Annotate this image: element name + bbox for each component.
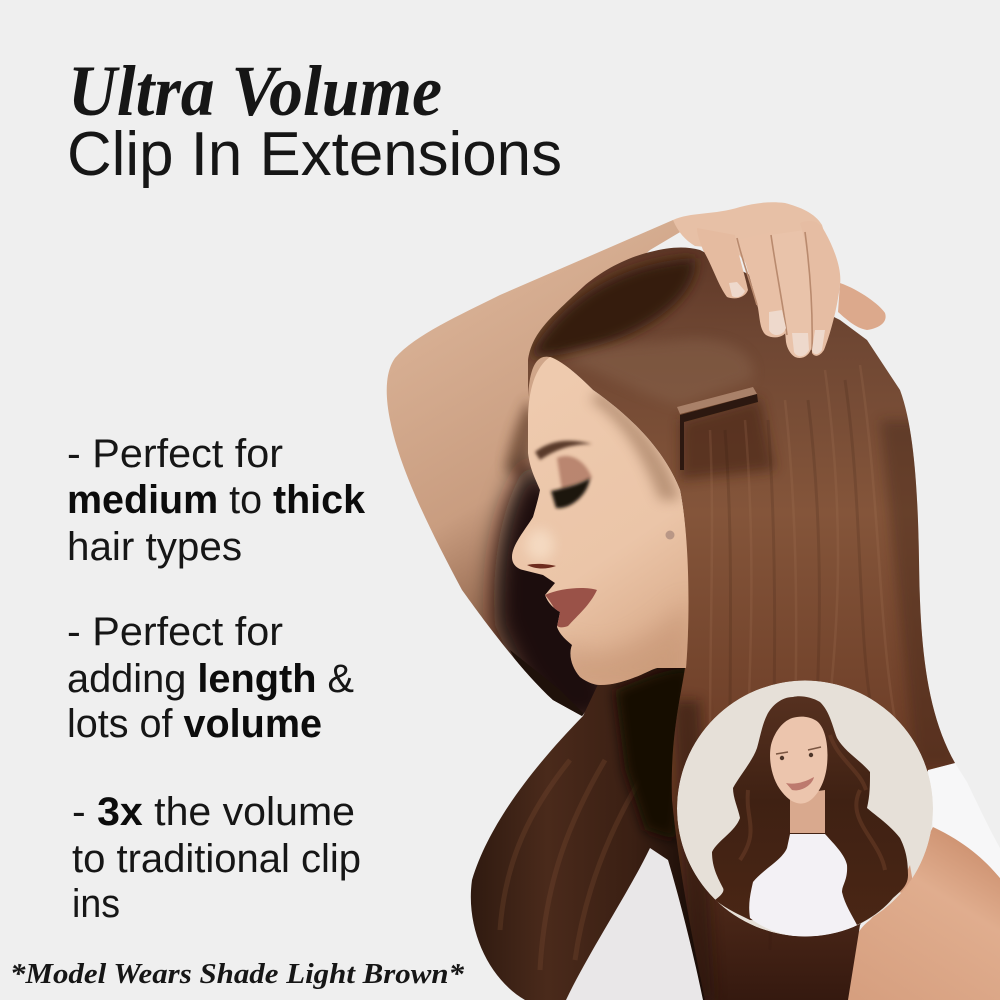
text block: medium to thick hair: hair types — [67, 525, 242, 569]
inset neck — [790, 790, 825, 833]
inset eyes, brows and smile — [776, 747, 821, 790]
inset white top — [749, 834, 857, 937]
inset hair — [712, 696, 908, 925]
white top left — [566, 848, 703, 1000]
fingernails — [729, 282, 825, 356]
cheek and jaw shading — [570, 614, 688, 685]
inset face — [770, 717, 828, 804]
hair shading and strands — [530, 258, 960, 1000]
title — [67, 51, 562, 189]
text block: medium to thick hair — [67, 432, 366, 569]
white top strap — [928, 763, 1000, 878]
text block: 3x volume — [72, 790, 361, 926]
text block: length and volume: adding length & — [67, 657, 354, 701]
inset circle photo — [677, 680, 933, 937]
main hair — [528, 248, 955, 1000]
model photo illustration — [380, 202, 1000, 1000]
clip-in weft — [677, 387, 758, 470]
ring finger — [770, 230, 812, 358]
text block: length and volume — [67, 610, 354, 746]
finger gaps — [737, 232, 812, 350]
text block: 3x volume: ins — [72, 882, 120, 926]
face — [512, 357, 688, 685]
inset skin sliver — [899, 865, 912, 893]
eyeshadow — [557, 456, 592, 490]
title: Ultra Volume — [68, 51, 442, 131]
text block: medium to thick hair: medium to thick — [67, 478, 366, 522]
shadow under jaw — [615, 668, 690, 840]
nose highlight — [526, 529, 554, 561]
eyebrow — [535, 441, 592, 460]
back hair — [471, 655, 710, 1000]
little finger — [800, 221, 840, 356]
index finger — [697, 228, 748, 298]
title: Clip In Extensions — [67, 120, 562, 189]
hand on head — [673, 202, 886, 358]
text block: length and volume: - Perfect for — [67, 610, 283, 654]
footnote: *Model Wears Shade Light Brown* — [10, 958, 465, 990]
middle finger — [738, 232, 788, 337]
back of hand and wrist — [673, 202, 840, 310]
text block: medium to thick hair: - Perfect for — [67, 432, 283, 476]
nostril — [527, 564, 556, 569]
raised arm — [386, 220, 680, 716]
text block: 3x volume: to traditional clip — [72, 837, 361, 881]
text block: 3x volume: - 3x the volume — [72, 790, 355, 834]
shoulder — [848, 827, 1000, 1000]
inset hair highlights — [740, 735, 885, 870]
lips — [545, 588, 597, 627]
back hair strands — [500, 760, 640, 970]
mole — [666, 530, 674, 540]
thumb — [838, 283, 886, 330]
text block: length and volume: lots of volume — [67, 702, 322, 746]
eye — [551, 478, 590, 508]
